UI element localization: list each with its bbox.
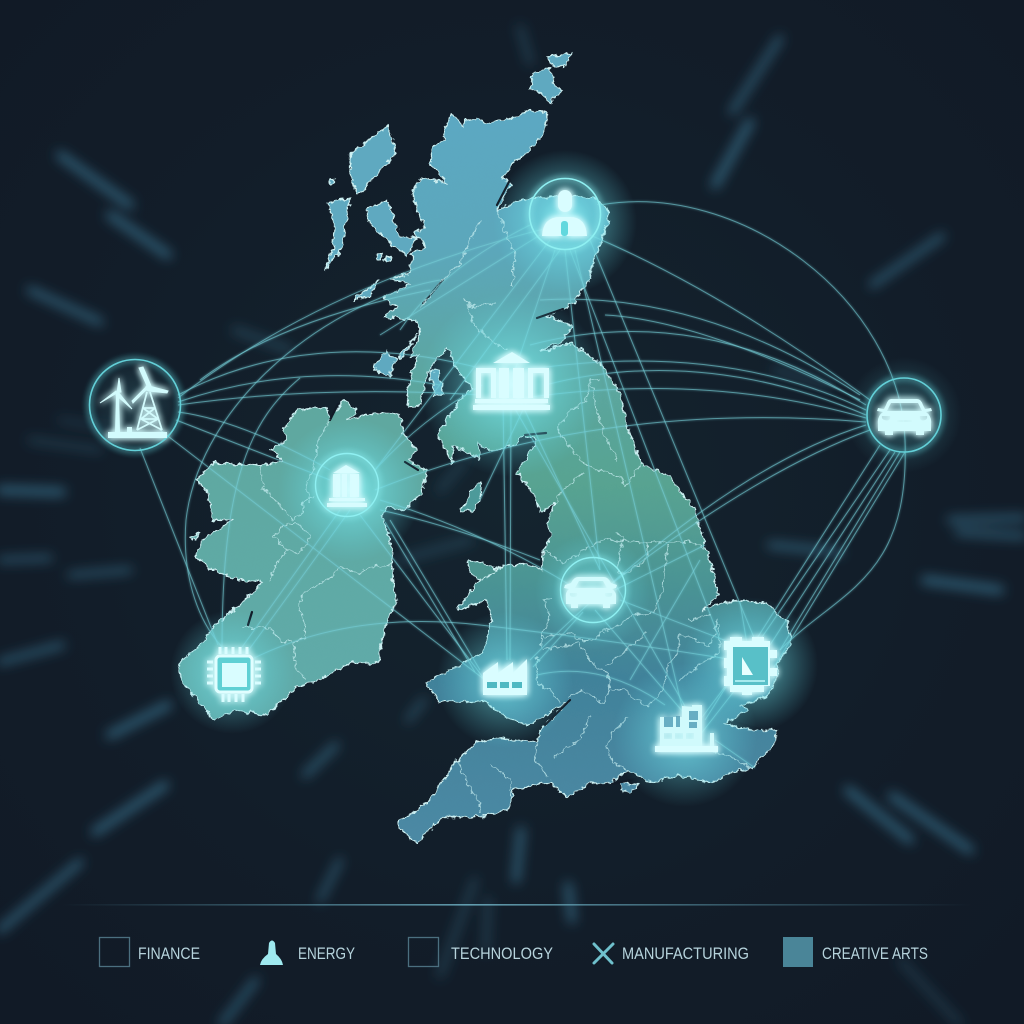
icon: finance hub with classical bank <box>473 352 550 410</box>
regional boundaries <box>243 210 750 813</box>
legend item: creative arts: CREATIVE ARTS <box>822 944 928 963</box>
sea inlets <box>248 180 760 784</box>
legend item: technology <box>408 938 553 966</box>
legend item: energy <box>260 940 355 965</box>
map: Britain and Ireland <box>177 53 792 843</box>
icon: technology hub in East Anglia <box>724 637 777 695</box>
legend <box>62 904 972 967</box>
landmass: Great Britain <box>325 53 792 843</box>
icon: manufacturing hub with factory in Wales <box>483 659 527 695</box>
icon: energy hub with wind turbines and pylon <box>90 360 180 450</box>
icon: technology hub with microchip <box>207 647 261 702</box>
hub glow halos <box>80 150 962 807</box>
legend item: finance <box>100 938 200 966</box>
legend item: energy: ENERGY <box>298 944 355 963</box>
legend item: manufacturing: MANUFACTURING <box>622 944 749 963</box>
icon: finance hub over Ireland <box>316 454 378 516</box>
icon: automotive hub with car <box>867 378 941 452</box>
islands: Scottish and others <box>325 53 573 397</box>
icon: energy hub with rocket-like marker <box>530 178 600 250</box>
landmass: Ireland <box>177 400 427 720</box>
network connection lines <box>140 202 905 768</box>
legend item: creative arts <box>783 937 928 967</box>
icon: manufacturing hub near London <box>655 705 718 752</box>
legend item: finance: FINANCE <box>138 944 200 963</box>
legend item: technology: TECHNOLOGY <box>451 944 553 963</box>
icon: automotive hub with car in the Midlands <box>560 558 626 622</box>
